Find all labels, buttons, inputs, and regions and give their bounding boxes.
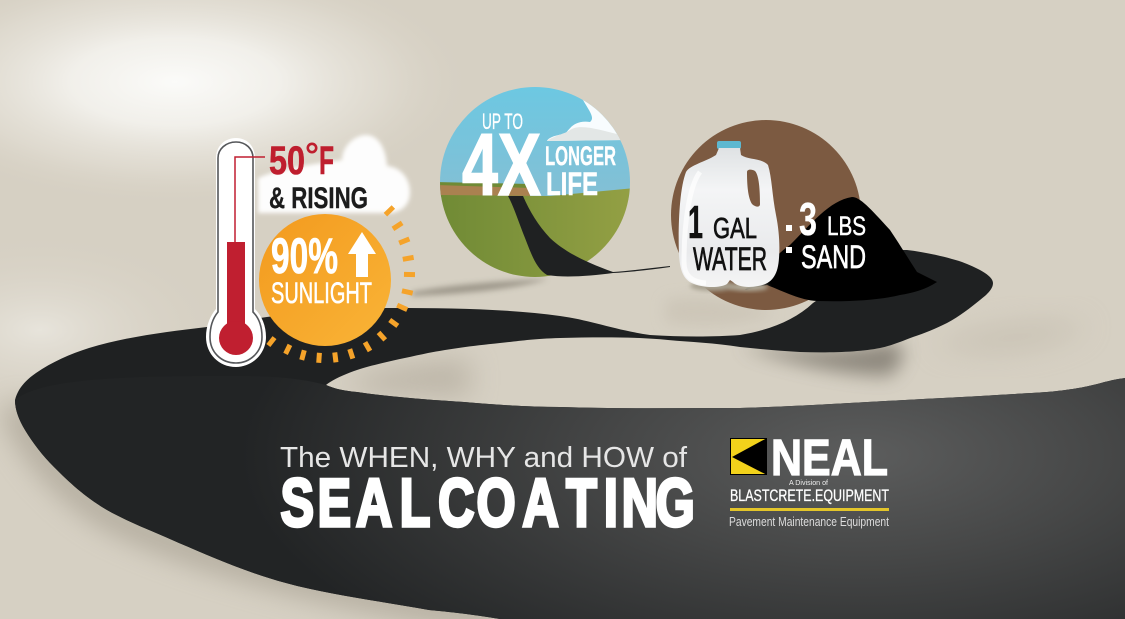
3 lbs sand text: 3 xyxy=(799,193,817,245)
1 gal water text: GAL xyxy=(713,213,757,245)
panel: longer life circle xyxy=(435,85,670,280)
logo: neal blastcrete equipment xyxy=(729,429,889,529)
panel: temperature and sunlight xyxy=(206,135,415,367)
thermometer xyxy=(206,138,266,367)
logo: neal blastcrete equipment: Pavement Maintenance Equipment xyxy=(729,514,889,529)
1 gal water text xyxy=(688,196,767,277)
up to 4x longer life text xyxy=(462,109,616,214)
50 degrees f text: F xyxy=(319,139,334,183)
up to 4x longer life text: LONGER xyxy=(545,141,616,171)
90% sunlight text: SUNLIGHT xyxy=(271,277,372,310)
sky and landscape xyxy=(435,85,635,280)
asphalt road xyxy=(15,250,1125,619)
50 degrees f text xyxy=(269,139,334,183)
sun rays xyxy=(268,207,415,363)
sun xyxy=(259,214,391,346)
title: SEALCOATING xyxy=(280,465,695,541)
ratio colon xyxy=(786,225,792,253)
logo: neal blastcrete equipment: NEAL xyxy=(771,429,888,486)
logo: neal blastcrete equipment: A Division of xyxy=(789,478,829,487)
up to 4x longer life text: LIFE xyxy=(546,166,598,202)
brown circle xyxy=(671,120,861,310)
up to 4x longer life text: UP TO xyxy=(482,109,523,134)
title: The WHEN, WHY and HOW of xyxy=(280,442,688,474)
90% sunlight text xyxy=(271,228,372,310)
icon: yellow and black arrow mark xyxy=(730,438,767,475)
90% sunlight text: 90% xyxy=(271,228,338,284)
3 lbs sand text: SAND xyxy=(801,239,866,275)
road through the field xyxy=(508,196,670,276)
1 gal water text: 1 xyxy=(688,196,703,248)
icon: up arrow xyxy=(348,232,376,277)
panel: water and sand ratio xyxy=(671,120,937,310)
50 degrees f text: 50 xyxy=(269,139,305,183)
up to 4x longer life text: 4X xyxy=(462,115,541,214)
3 lbs sand text xyxy=(799,193,866,275)
logo: neal blastcrete equipment: BLASTCRETE.EQUIPMENT xyxy=(730,486,889,505)
sand pile xyxy=(745,197,937,301)
cloud xyxy=(258,135,410,213)
milk jug xyxy=(679,141,779,291)
3 lbs sand text: LBS xyxy=(827,211,866,241)
and rising text: & RISING xyxy=(269,182,368,215)
1 gal water text: WATER xyxy=(693,241,767,277)
